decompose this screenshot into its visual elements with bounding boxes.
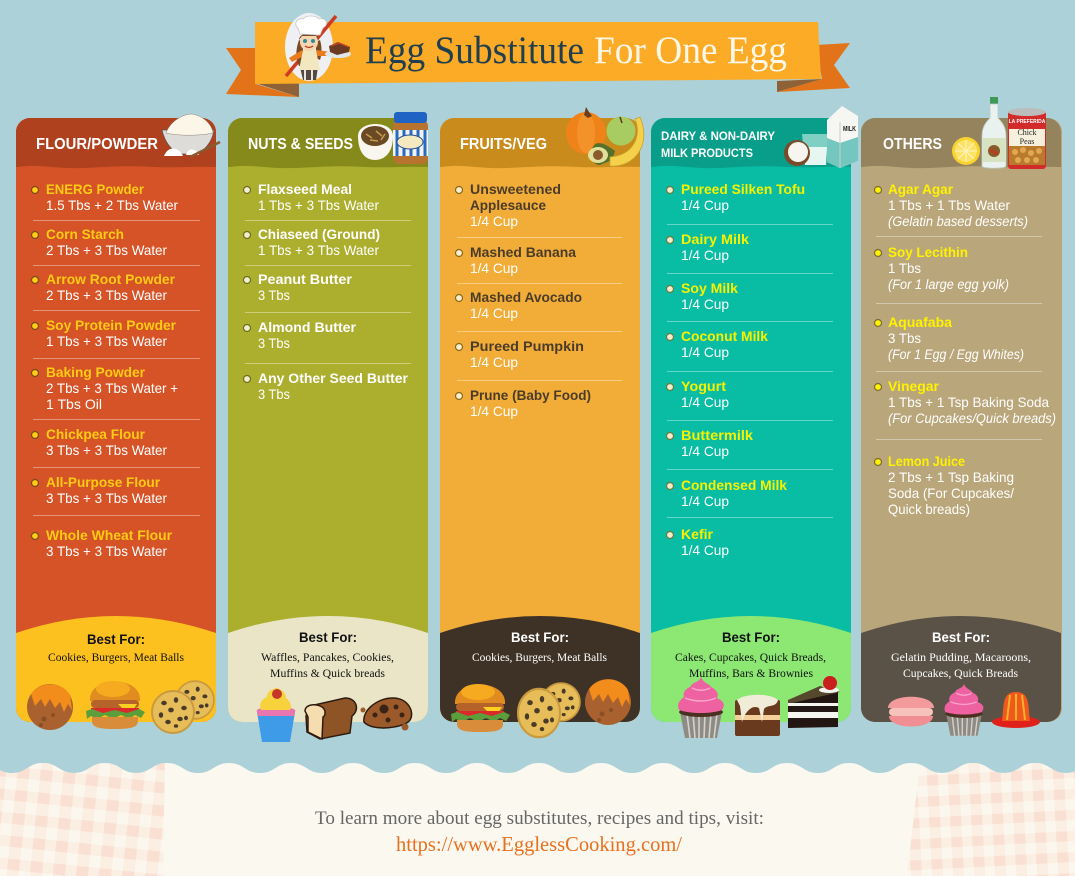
best-for footer bbox=[861, 616, 1061, 722]
item: Coconut Milk bbox=[681, 328, 768, 360]
icon: lemon bbox=[952, 137, 980, 165]
item: Peanut Butter bbox=[258, 271, 353, 303]
best-for footer: Gelatin Pudding, Macaroons, bbox=[891, 650, 1031, 664]
bullet dots bbox=[666, 186, 674, 538]
panel heading bbox=[661, 131, 775, 160]
item: Mashed Banana bbox=[470, 244, 576, 276]
icon: chick peas can: Peas bbox=[1020, 137, 1034, 146]
item: Buttermilk bbox=[681, 427, 753, 459]
item: Baking Powder: 2 Tbs + 3 Tbs Water + bbox=[46, 380, 178, 396]
gingham cloth: right bbox=[907, 755, 1075, 876]
item: Lemon Juice: Lemon Juice bbox=[888, 453, 965, 469]
item: Arrow Root Powder: Arrow Root Powder bbox=[46, 271, 176, 287]
ribbon fold: right bbox=[777, 79, 822, 92]
item: Agar Agar: 1 Tbs + 1 Tbs Water bbox=[888, 197, 1010, 213]
item: Corn Starch: 2 Tbs + 3 Tbs Water bbox=[46, 242, 167, 258]
item: Condensed Milk bbox=[681, 477, 787, 509]
item: Soy Protein Powder: 1 Tbs + 3 Tbs Water bbox=[46, 333, 167, 349]
footer bbox=[0, 755, 1075, 876]
icon: peanut butter jar bbox=[393, 112, 428, 164]
bullet dots bbox=[244, 186, 250, 382]
item: Kefir: Kefir bbox=[681, 526, 714, 542]
panel: others bbox=[861, 97, 1062, 736]
best-for footer: Muffins, Bars & Brownies bbox=[689, 666, 813, 680]
item: Mashed Avocado: 1/4 Cup bbox=[470, 305, 518, 321]
icon: pumpkin, apple, avocado and banana bbox=[566, 107, 644, 166]
panel heading: NUTS & SEEDS bbox=[248, 136, 353, 153]
panel header band bbox=[651, 118, 851, 168]
item: Soy Protein Powder bbox=[46, 317, 177, 349]
item: Dairy Milk: Dairy Milk bbox=[681, 231, 749, 247]
item: Peanut Butter: 3 Tbs bbox=[258, 287, 290, 303]
item: Chickpea Flour: Chickpea Flour bbox=[46, 426, 146, 442]
panel heading: MILK PRODUCTS bbox=[661, 148, 753, 160]
icon: burger bbox=[451, 684, 510, 732]
item: Pureed Pumpkin: Pureed Pumpkin bbox=[470, 338, 584, 354]
item: Yogurt: 1/4 Cup bbox=[681, 394, 729, 410]
icon: meatball bbox=[585, 679, 631, 725]
item: Vinegar: 1 Tbs + 1 Tsp Baking Soda bbox=[888, 394, 1049, 410]
icon: pink cupcake bbox=[678, 677, 724, 738]
icon: blue cupcake bbox=[257, 688, 295, 742]
item: Arrow Root Powder: 2 Tbs + 3 Tbs Water bbox=[46, 287, 167, 303]
item: Unsweetened Applesauce: Applesauce bbox=[470, 197, 546, 213]
panel heading: FRUITS/VEG bbox=[460, 136, 547, 153]
item: Soy Lecithin: (For 1 large egg yolk) bbox=[888, 277, 1009, 292]
icon: cake slice bbox=[788, 676, 840, 728]
best-for footer bbox=[440, 616, 640, 722]
item: Peanut Butter: Peanut Butter bbox=[258, 271, 353, 287]
item: Prune (Baby Food): 1/4 Cup bbox=[470, 403, 518, 419]
panel header band bbox=[228, 118, 428, 168]
item: Unsweetened Applesauce: Unsweetened bbox=[470, 181, 561, 197]
panel body bbox=[651, 118, 851, 722]
icon: chick peas can: LA PREFERIDA bbox=[1009, 119, 1046, 125]
panel: fruits/veg bbox=[440, 107, 644, 737]
item: Pureed Pumpkin bbox=[470, 338, 584, 370]
item: Any Other Seed Butter bbox=[258, 370, 409, 402]
best-for footer: Cakes, Cupcakes, Quick Breads, bbox=[675, 650, 826, 664]
panel header band bbox=[16, 118, 216, 168]
icon: layered cake cube bbox=[735, 695, 780, 736]
bullet dots bbox=[874, 186, 882, 466]
ribbon main bbox=[255, 22, 821, 84]
icon: coconut, glass and milk carton: MILK bbox=[843, 126, 856, 133]
panel heading: FLOUR/POWDER bbox=[36, 136, 158, 153]
item: Aquafaba: Aquafaba bbox=[888, 314, 952, 330]
footer background bbox=[0, 763, 1075, 876]
item: Any Other Seed Butter: Any Other Seed Butter bbox=[258, 370, 409, 386]
item: Mashed Avocado: Mashed Avocado bbox=[470, 289, 582, 305]
best-for footer: Best For: bbox=[932, 630, 990, 645]
item: Yogurt bbox=[681, 378, 729, 410]
item: Soy Protein Powder: Soy Protein Powder bbox=[46, 317, 177, 333]
item: Unsweetened Applesauce: 1/4 Cup bbox=[470, 213, 518, 229]
panel body bbox=[861, 118, 1062, 722]
item: Flaxseed Meal bbox=[258, 181, 379, 213]
panel: flour/powder bbox=[16, 114, 220, 733]
item: Agar Agar bbox=[888, 181, 1028, 229]
item: Lemon Juice bbox=[888, 453, 1014, 517]
best-for footer: Muffins & Quick breads bbox=[270, 666, 385, 680]
item: Buttermilk: Buttermilk bbox=[681, 427, 753, 443]
item: Lemon Juice: Soda (For Cupcakes/ bbox=[888, 485, 1014, 501]
item: Kefir bbox=[681, 526, 729, 558]
item: Dairy Milk: 1/4 Cup bbox=[681, 247, 729, 263]
item: Baking Powder: Baking Powder bbox=[46, 364, 146, 380]
item: Soy Lecithin: Soy Lecithin bbox=[888, 244, 968, 260]
item: Almond Butter bbox=[258, 319, 357, 351]
icon: macaron bbox=[888, 697, 934, 726]
item: Agar Agar: Agar Agar bbox=[888, 181, 954, 197]
icon: flour bowl bbox=[162, 114, 220, 157]
title banner bbox=[226, 13, 850, 97]
icon: burger bbox=[86, 681, 145, 729]
panel header band bbox=[440, 118, 640, 168]
item: Any Other Seed Butter: 3 Tbs bbox=[258, 386, 290, 402]
item: Whole Wheat Flour: 3 Tbs + 3 Tbs Water bbox=[46, 543, 167, 559]
item: Flaxseed Meal: 1 Tbs + 3 Tbs Water bbox=[258, 197, 379, 213]
item: Whole Wheat Flour bbox=[46, 527, 173, 559]
footer link: https://www.EgglessCooking.com/ bbox=[396, 832, 682, 856]
panel body bbox=[228, 118, 428, 722]
item: Flaxseed Meal: Flaxseed Meal bbox=[258, 181, 352, 197]
item: Aquafaba: (For 1 Egg / Egg Whites) bbox=[888, 347, 1024, 362]
ribbon tail: right bbox=[777, 43, 850, 92]
title: Egg Substitute bbox=[365, 29, 584, 72]
item: Whole Wheat Flour: Whole Wheat Flour bbox=[46, 527, 173, 543]
best-for footer: Best For: bbox=[722, 630, 780, 645]
bullet dots bbox=[32, 186, 38, 540]
panel: dairy & non-dairy bbox=[651, 106, 858, 738]
item: Chiaseed (Ground): Chiaseed (Ground) bbox=[258, 226, 380, 242]
item: Buttermilk: 1/4 Cup bbox=[681, 443, 729, 459]
item: Soy Milk: Soy Milk bbox=[681, 280, 738, 296]
item: All-Purpose Flour bbox=[46, 474, 167, 506]
icon: pink cupcake bbox=[945, 684, 983, 736]
item: Soy Milk: 1/4 Cup bbox=[681, 296, 729, 312]
item: Condensed Milk: Condensed Milk bbox=[681, 477, 787, 493]
item: Almond Butter: 3 Tbs bbox=[258, 335, 290, 351]
icon: chef in egg bbox=[285, 13, 351, 81]
best-for footer bbox=[16, 616, 216, 722]
best-for footer: Best For: bbox=[511, 630, 569, 645]
item: Chiaseed (Ground): 1 Tbs + 3 Tbs Water bbox=[258, 242, 379, 258]
panel header band bbox=[861, 118, 1061, 168]
item: All-Purpose Flour: 3 Tbs + 3 Tbs Water bbox=[46, 490, 167, 506]
icon: chocolate cookie bbox=[360, 698, 412, 730]
icon: chick peas can: Chick bbox=[1017, 128, 1037, 137]
item: ENERG Powder: 1.5 Tbs + 2 Tbs Water bbox=[46, 197, 178, 213]
item: Chickpea Flour: 3 Tbs + 3 Tbs Water bbox=[46, 442, 167, 458]
item: Pureed Silken Tofu: 1/4 Cup bbox=[681, 197, 729, 213]
item: Yogurt: Yogurt bbox=[681, 378, 726, 394]
panel body bbox=[16, 118, 216, 722]
item: Condensed Milk: 1/4 Cup bbox=[681, 493, 729, 509]
best-for footer: Cookies, Burgers, Meat Balls bbox=[48, 650, 184, 664]
best-for footer: Best For: bbox=[299, 630, 357, 645]
title: For One Egg bbox=[594, 29, 787, 72]
icon: orange jelly bbox=[992, 692, 1040, 728]
item: Unsweetened Applesauce bbox=[470, 181, 561, 229]
item: Lemon Juice: Quick breads) bbox=[888, 501, 970, 517]
item: Almond Butter: Almond Butter bbox=[258, 319, 357, 335]
item: Pureed Silken Tofu: Pureed Silken Tofu bbox=[681, 181, 805, 197]
item: Coconut Milk: 1/4 Cup bbox=[681, 344, 729, 360]
panel body bbox=[440, 118, 640, 722]
item: Corn Starch: Corn Starch bbox=[46, 226, 124, 242]
icon: meatball bbox=[27, 684, 73, 730]
item: Prune (Baby Food): Prune (Baby Food) bbox=[470, 387, 591, 403]
bullet dots bbox=[456, 186, 462, 400]
item: Soy Lecithin bbox=[888, 244, 1009, 292]
item: ENERG Powder: ENERG Powder bbox=[46, 181, 145, 197]
icon: cookies bbox=[152, 681, 214, 733]
gingham cloth: left bbox=[0, 755, 165, 876]
item: ENERG Powder bbox=[46, 181, 178, 213]
item: Mashed Banana: 1/4 Cup bbox=[470, 260, 518, 276]
item: Corn Starch bbox=[46, 226, 167, 258]
icon: seed bowl bbox=[358, 124, 393, 160]
item: Pureed Pumpkin: 1/4 Cup bbox=[470, 354, 518, 370]
icon: cookies bbox=[518, 683, 580, 737]
panel: nuts & seeds bbox=[228, 112, 428, 742]
item: Kefir: 1/4 Cup bbox=[681, 542, 729, 558]
best-for footer: Waffles, Pancakes, Cookies, bbox=[261, 650, 394, 664]
icon: coconut, glass and milk carton bbox=[784, 106, 858, 168]
panel heading: DAIRY & NON-DAIRY bbox=[661, 131, 775, 143]
item: Lemon Juice: 2 Tbs + 1 Tsp Baking bbox=[888, 469, 1014, 485]
best-for footer bbox=[651, 616, 851, 722]
item: Baking Powder: 1 Tbs Oil bbox=[46, 396, 102, 412]
item: Chiaseed (Ground) bbox=[258, 226, 380, 258]
icon: bread loaf bbox=[305, 698, 356, 739]
ribbon fold: left bbox=[255, 83, 299, 97]
item: Dairy Milk bbox=[681, 231, 749, 263]
item: Soy Milk bbox=[681, 280, 738, 312]
best-for footer: Best For: bbox=[87, 632, 145, 647]
panel heading: OTHERS bbox=[883, 136, 942, 153]
best-for footer: Cupcakes, Quick Breads bbox=[903, 666, 1018, 680]
item: Mashed Banana: Mashed Banana bbox=[470, 244, 576, 260]
best-for footer: Cookies, Burgers, Meat Balls bbox=[472, 650, 607, 664]
icon: chick peas can bbox=[1008, 108, 1046, 169]
best-for footer bbox=[228, 616, 428, 722]
item: All-Purpose Flour: All-Purpose Flour bbox=[46, 474, 161, 490]
footer text: To learn more about egg substitutes, recipes and tips, visit: bbox=[315, 809, 764, 829]
item: Aquafaba: 3 Tbs bbox=[888, 330, 921, 346]
ribbon tail: left bbox=[226, 48, 299, 97]
icon: vinegar bottle bbox=[982, 97, 1006, 168]
item: Coconut Milk: Coconut Milk bbox=[681, 328, 768, 344]
item: Vinegar bbox=[888, 378, 1056, 426]
item: Prune (Baby Food) bbox=[470, 387, 591, 419]
item: Vinegar: Vinegar bbox=[888, 378, 940, 394]
item: Soy Lecithin: 1 Tbs bbox=[888, 260, 921, 276]
item: Pureed Silken Tofu bbox=[681, 181, 805, 213]
item: Mashed Avocado bbox=[470, 289, 582, 321]
item: Agar Agar: (Gelatin based desserts) bbox=[888, 214, 1028, 229]
item: Vinegar: (For Cupcakes/Quick breads) bbox=[888, 411, 1056, 426]
item: Arrow Root Powder bbox=[46, 271, 176, 303]
item: Baking Powder bbox=[46, 364, 178, 412]
item: Aquafaba bbox=[888, 314, 1024, 362]
item: Chickpea Flour bbox=[46, 426, 167, 458]
